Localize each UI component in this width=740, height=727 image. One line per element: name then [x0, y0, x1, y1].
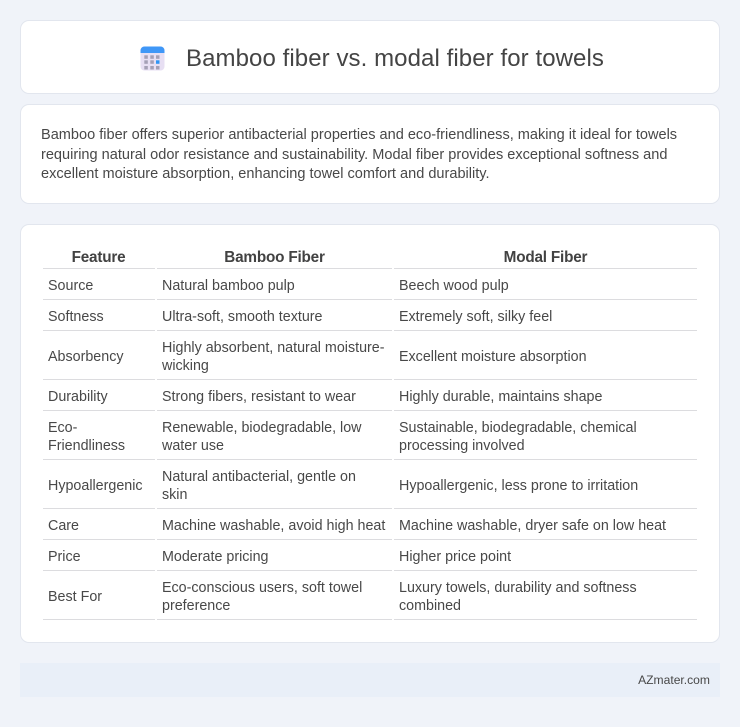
row: durability: Strong fibers, resistant to wear: [162, 389, 356, 405]
row: care: Machine washable, avoid high heat: [162, 518, 385, 534]
row: price: [48, 549, 511, 565]
row: care: [48, 518, 666, 534]
summary text: [41, 127, 677, 182]
table header: Feature: [72, 249, 125, 266]
row: durability: [48, 389, 602, 405]
row: source: Beech wood pulp: [399, 278, 509, 294]
row: durability: Durability: [48, 389, 108, 405]
row: softness: [48, 309, 552, 325]
table header: [72, 249, 588, 266]
summary text: Bamboo fiber offers superior antibacterial properties and eco-friendliness, making it ideal for towels: [41, 127, 677, 143]
row: eco-friendliness: Friendliness: [48, 438, 125, 454]
row: eco-friendliness: water use: [162, 438, 224, 454]
row: eco-friendliness: Renewable, biodegradable, low: [162, 420, 362, 436]
panel: summary: [20, 104, 720, 204]
row: softness: Extremely soft, silky feel: [399, 309, 552, 325]
row: absorbency: Highly absorbent, natural moisture-: [162, 340, 385, 356]
row: best for: Eco-conscious users, soft towel: [162, 580, 362, 596]
row: price: Price: [48, 549, 81, 565]
row: best for: combined: [399, 598, 461, 614]
summary text: excellent moisture absorption, enhancing towel comfort and durability.: [41, 166, 490, 182]
row: source: [48, 278, 509, 294]
row: eco-friendliness: Sustainable, biodegradable, chemical: [399, 420, 637, 436]
row: hypoallergenic: Natural antibacterial, gentle on: [162, 469, 356, 485]
icon: calendar: [140, 46, 164, 70]
row: eco-friendliness: Eco-: [48, 420, 77, 436]
row: absorbency: Excellent moisture absorption: [399, 349, 587, 365]
row: absorbency: [48, 340, 587, 374]
row: absorbency: Absorbency: [48, 349, 124, 365]
row: eco-friendliness: processing involved: [399, 438, 525, 454]
row: price: Higher price point: [399, 549, 511, 565]
row: hypoallergenic: skin: [162, 487, 187, 503]
row: best for: [48, 580, 637, 614]
row: care: Machine washable, dryer safe on low heat: [399, 518, 666, 534]
table header: Modal Fiber: [504, 249, 587, 266]
row: hypoallergenic: Hypoallergenic: [48, 478, 143, 494]
row: softness: Softness: [48, 309, 104, 325]
footer bar: [20, 663, 720, 697]
panel: title card: [20, 20, 720, 94]
row: care: Care: [48, 518, 79, 534]
panel: comparison table: [20, 224, 720, 643]
row: eco-friendliness: [48, 420, 637, 454]
row: hypoallergenic: Hypoallergenic, less prone to irritation: [399, 478, 638, 494]
row: source: Source: [48, 278, 93, 294]
row: hypoallergenic: [48, 469, 638, 503]
row: best for: Best For: [48, 589, 102, 605]
summary text: requiring natural odor resistance and sustainability. Modal fiber provides exceptional softness and: [41, 146, 667, 162]
row: absorbency: wicking: [162, 358, 209, 374]
title: Bamboo fiber vs. modal fiber for towels: [186, 45, 604, 72]
table header: Bamboo Fiber: [224, 249, 325, 266]
row: durability: Highly durable, maintains shape: [399, 389, 602, 405]
row: price: Moderate pricing: [162, 549, 268, 565]
row: best for: preference: [162, 598, 230, 614]
row: softness: Ultra-soft, smooth texture: [162, 309, 322, 325]
row: source: Natural bamboo pulp: [162, 278, 295, 294]
row: best for: Luxury towels, durability and softness: [399, 580, 637, 596]
footer credit: AZmater.com: [638, 673, 710, 687]
